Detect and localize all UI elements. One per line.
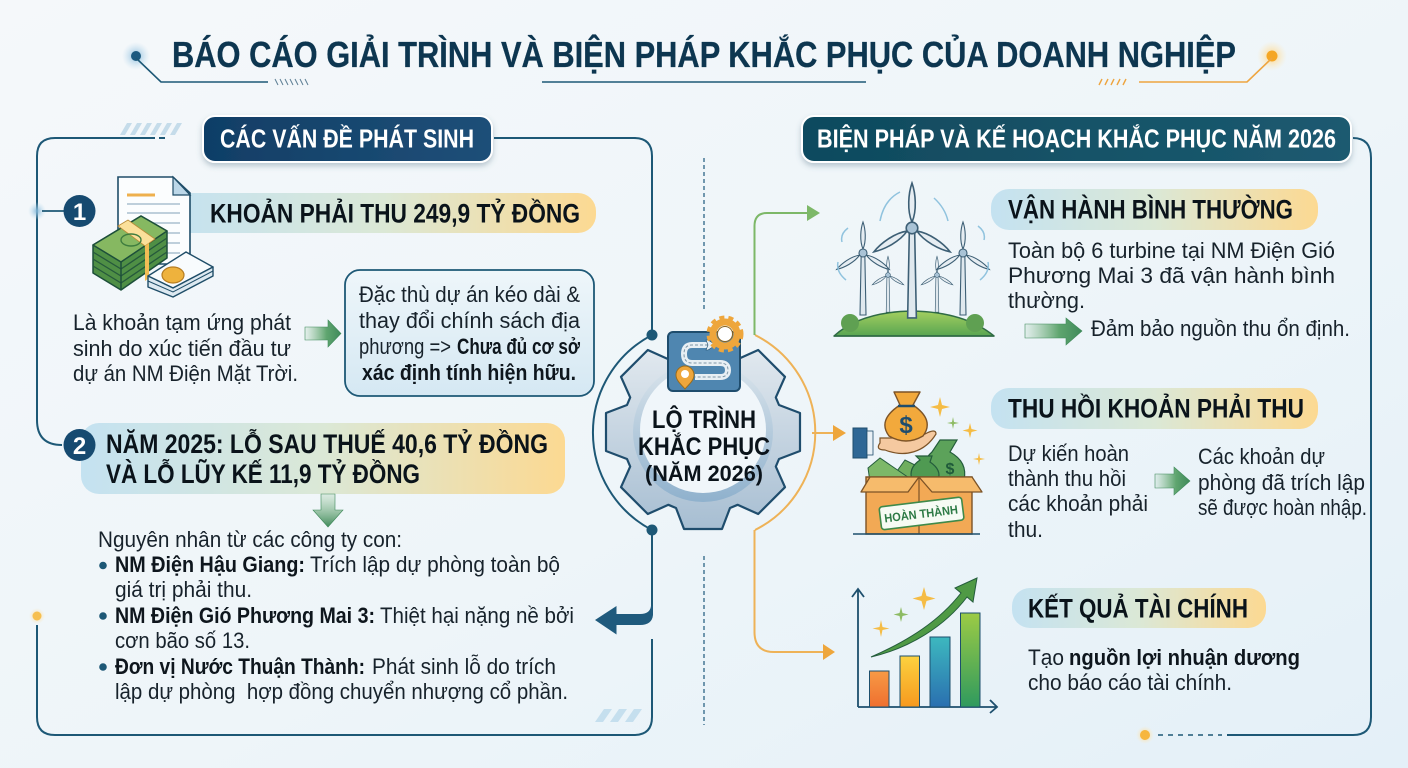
icon: money bag and box: $: [946, 461, 955, 478]
badge 2: 2: [73, 433, 86, 460]
text: item 1 description: dự án NM Điện Mặt Trời.: [73, 361, 298, 386]
callout box: phương =>: [359, 334, 451, 359]
text: causes list: Thiệt hại nặng nề bởi: [380, 603, 574, 628]
section: receivables recovery: sẽ được hoàn nhập.: [1198, 495, 1367, 520]
section: financial result: KẾT QUẢ TÀI CHÍNH: [1028, 592, 1248, 624]
section: financial result: nguồn lợi nhuận dương: [1069, 645, 1300, 670]
section: receivables recovery: Dự kiến hoàn: [1008, 441, 1129, 466]
text: causes list: lập dự phòng hợp đồng chuyển nhượng cổ phần.: [115, 679, 568, 704]
item 2 heading: NĂM 2025: LỖ SAU THUẾ 40,6 TỶ ĐỒNG: [106, 427, 548, 459]
callout box: Đặc thù dự án kéo dài &: [359, 282, 580, 307]
icon: wind turbines: [834, 183, 994, 336]
right panel frame: [1136, 138, 1371, 744]
title decoration right: [1099, 41, 1287, 85]
section: receivables recovery: phòng đã trích lập: [1198, 470, 1365, 495]
text: causes list: NM Điện Gió Phương Mai 3:: [115, 603, 375, 628]
section: financial result: [1012, 588, 1300, 695]
text: causes list: NM Điện Hậu Giang:: [115, 552, 305, 577]
title: BÁO CÁO GIẢI TRÌNH VÀ BIỆN PHÁP KHẮC PHỤC CỦA DOANH NGHIỆP: [172, 33, 1236, 75]
central gear: [606, 318, 800, 529]
title decoration left: [122, 42, 308, 85]
section: receivables recovery: Các khoản dự: [1198, 444, 1325, 469]
section: financial result: Tạo: [1028, 645, 1064, 670]
section: normal operation: thường.: [1008, 288, 1085, 313]
item 1 heading: [170, 193, 596, 233]
arrow: orange lower: [754, 530, 835, 660]
central connectors: [593, 330, 815, 536]
section: normal operation: Phương Mai 3 đã vận hành bình: [1008, 263, 1335, 288]
arrow: to causes: [595, 530, 653, 634]
icon: money bag and box: $: [899, 412, 913, 439]
central gear: KHẮC PHỤC: [638, 431, 770, 461]
text: causes list: cơn bão số 13.: [115, 628, 250, 653]
item 2 heading: VÀ LỖ LŨY KẾ 11,9 TỶ ĐỒNG: [106, 457, 420, 489]
text: causes list: [98, 527, 574, 704]
badge 2: [64, 429, 96, 461]
title underline: [542, 81, 866, 83]
section: receivables recovery: thu.: [1008, 517, 1043, 542]
arrow: section 1: [1025, 318, 1082, 345]
item 2 heading: [81, 423, 565, 494]
text: item 1 description: [73, 310, 298, 386]
text: causes list: Phát sinh lỗ do trích: [372, 654, 556, 679]
left panel frame: [29, 123, 652, 735]
central gear: LỘ TRÌNH: [652, 404, 756, 434]
header: left: [203, 116, 492, 162]
sticker: [879, 497, 964, 530]
item 1 heading: KHOẢN PHẢI THU 249,9 TỶ ĐỒNG: [210, 196, 580, 228]
icon: roadmap: [668, 318, 742, 391]
header: right: [802, 116, 1351, 162]
text: causes list: giá trị phải thu.: [115, 577, 252, 602]
section: normal operation: Toàn bộ 6 turbine tại NM Điện Gió: [1008, 238, 1335, 263]
header: left: CÁC VẤN ĐỀ PHÁT SINH: [220, 124, 474, 154]
center dashed divider: [703, 158, 705, 725]
arrow: section 2: [1155, 467, 1190, 495]
section: normal operation: VẬN HÀNH BÌNH THƯỜNG: [1008, 194, 1293, 224]
section: receivables recovery: thành thu hồi: [1008, 466, 1126, 491]
callout box: thay đổi chính sách địa: [359, 308, 580, 333]
badge 1: [28, 195, 96, 227]
text: item 1 description: sinh do xúc tiến đầu tư: [73, 336, 291, 361]
icon: document and money: [93, 177, 213, 297]
section: financial result: cho báo cáo tài chính.: [1028, 670, 1232, 695]
text: causes list: Nguyên nhân từ các công ty con:: [98, 527, 402, 552]
arrow: orange middle: [812, 425, 846, 441]
badge 1: 1: [73, 199, 86, 226]
text: causes list: Trích lập dự phòng toàn bộ: [310, 552, 560, 577]
arrow: item 1: [305, 320, 341, 347]
arrow: green: [754, 205, 820, 335]
section: normal operation: Đảm bảo nguồn thu ổn định.: [1091, 316, 1350, 341]
arrow: down: [313, 494, 343, 527]
section: normal operation: [991, 189, 1350, 341]
icon: growth chart: [852, 578, 997, 713]
text: item 1 description: Là khoản tạm ứng phát: [73, 310, 292, 335]
sticker: HOÀN THÀNH: [883, 502, 959, 525]
section: receivables recovery: [991, 388, 1367, 542]
central gear: (NĂM 2026): [645, 461, 763, 486]
callout box: [345, 270, 594, 396]
icon: money bag and box: [853, 392, 985, 534]
section: receivables recovery: các khoản phải: [1008, 491, 1148, 516]
callout box: xác định tính hiện hữu.: [362, 360, 576, 385]
callout box: Chưa đủ cơ sở: [457, 334, 580, 359]
section: receivables recovery: THU HỒI KHOẢN PHẢI THU: [1008, 392, 1304, 424]
text: causes list: Đơn vị Nước Thuận Thành:: [115, 654, 365, 679]
